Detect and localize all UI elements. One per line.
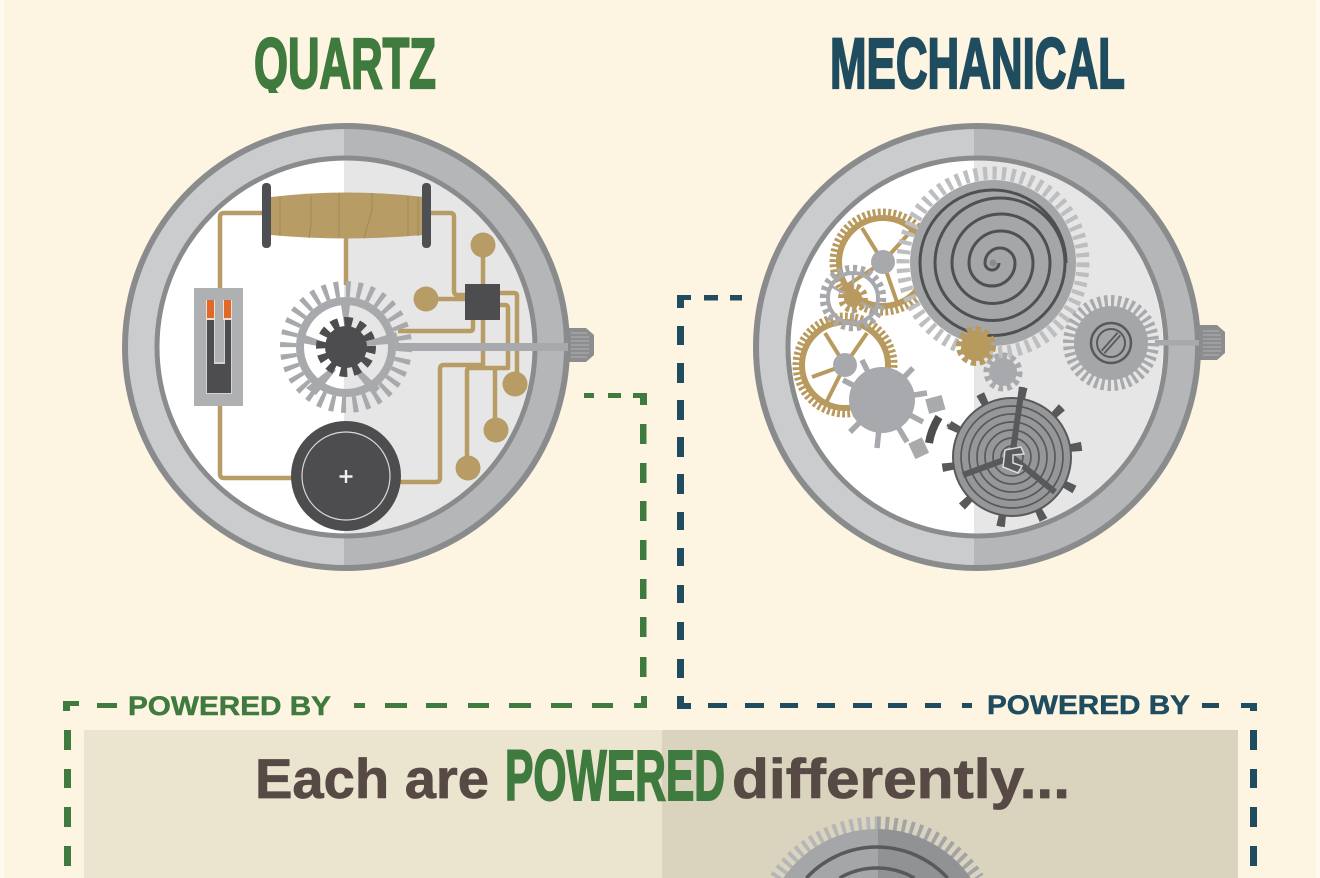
label: powered by (mechanical): POWERED BY xyxy=(987,690,1190,720)
ratchet wheel with screw xyxy=(1069,301,1153,385)
quartz watch illustration xyxy=(125,126,594,568)
gray gear wheel xyxy=(288,289,404,405)
stem xyxy=(1155,340,1199,346)
teal dashed connector xyxy=(677,295,1257,866)
battery xyxy=(291,421,401,531)
brass wheel lower xyxy=(796,316,894,414)
pallet fork xyxy=(908,395,1007,459)
title: Quartz: QUARTZ xyxy=(254,25,436,104)
quartz crystal tuning fork xyxy=(194,288,243,406)
mechanical watch illustration xyxy=(756,126,1225,568)
mainspring barrel gear xyxy=(903,173,1083,353)
small gray wheel with brass pinion xyxy=(823,268,883,328)
stem xyxy=(396,343,568,351)
label: powered by (quartz): POWERED BY xyxy=(128,691,331,721)
panel: powered differently xyxy=(84,730,1238,878)
heading: each are powered differently: POWERED xyxy=(505,737,725,816)
panel right half xyxy=(662,730,1238,878)
quartz circuit wires xyxy=(220,213,517,482)
quartz crown xyxy=(566,328,594,362)
gray hubs xyxy=(833,250,895,377)
microchip xyxy=(465,284,500,320)
balance wheel xyxy=(935,380,1089,534)
title: Mechanical: MECHANICAL xyxy=(830,25,1125,104)
panel left half xyxy=(84,730,662,878)
mechanical case bezel xyxy=(756,126,1198,568)
heading: each are powered differently xyxy=(255,737,1070,816)
gray pinion xyxy=(987,356,1019,388)
heading: each are powered differently: Each are xyxy=(255,747,489,810)
quartz circuit terminals xyxy=(414,232,528,480)
mechanical crown xyxy=(1196,325,1225,360)
brass pinion xyxy=(959,329,993,363)
quartz case bezel xyxy=(125,126,567,568)
brass wheel upper xyxy=(833,212,933,312)
mainspring gear, cropped xyxy=(776,823,978,878)
copper coil xyxy=(262,183,431,248)
escape wheel xyxy=(843,360,927,448)
heading: each are powered differently: differently... xyxy=(732,747,1070,810)
green dashed connector xyxy=(63,393,647,866)
black pinion gear xyxy=(320,321,372,373)
